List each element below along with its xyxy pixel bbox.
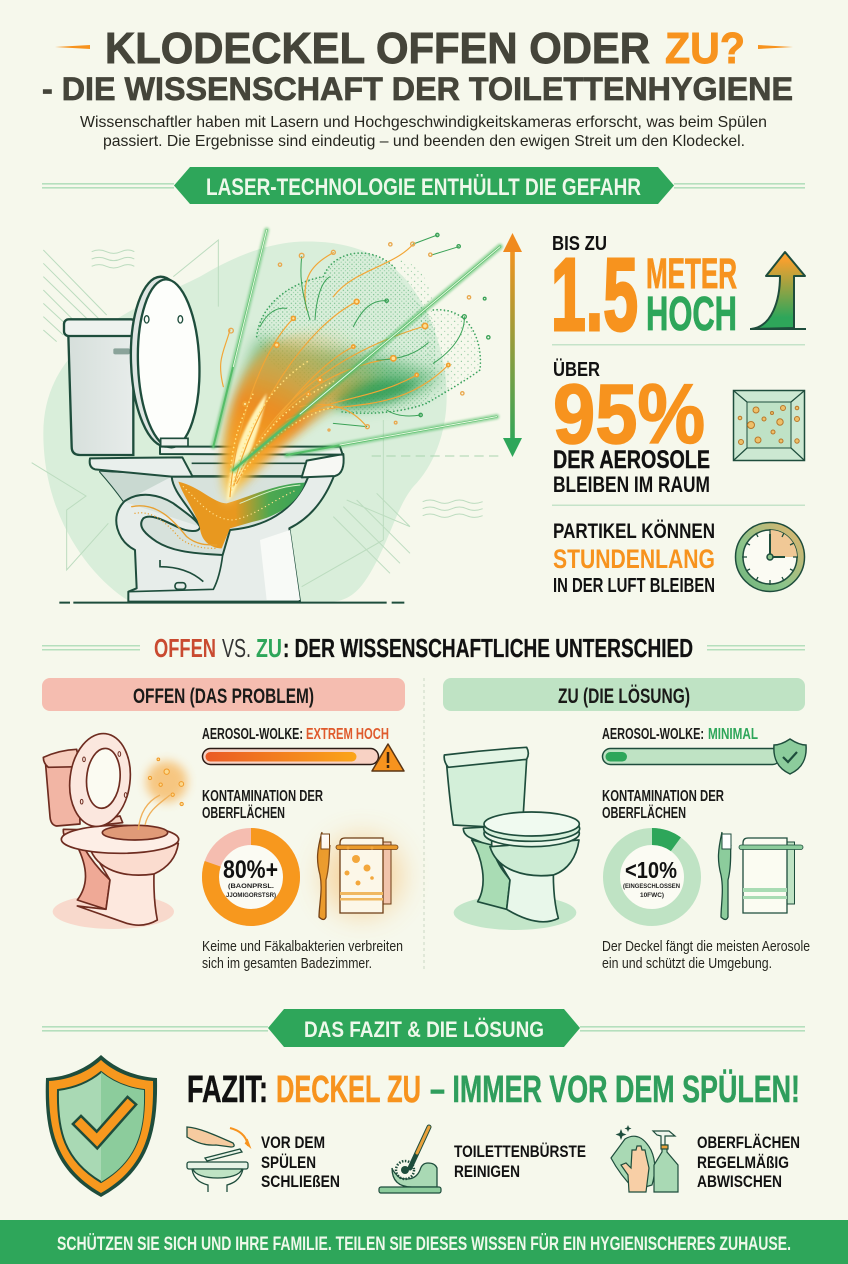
icon: rising arrow: [750, 252, 806, 329]
tip text: REINIGEN: [454, 1162, 520, 1181]
icon: clock: [736, 522, 804, 592]
number: 95%: [553, 367, 705, 461]
caption 2: BLEIBEN IM RAUM: [553, 472, 710, 497]
caption 1: DER AEROSOLE: [553, 446, 710, 474]
bowl inner band: [190, 453, 310, 477]
donut chart: below 10 percent: 10FWC): [640, 892, 664, 899]
toilet pedestal: [100, 472, 335, 602]
title decorative dash right: [758, 45, 793, 49]
aerosol glow: [138, 758, 187, 830]
panel header: ZU (DIE LÖSUNG): [558, 685, 690, 708]
section banner: laser technology: [42, 167, 805, 204]
panel header: [443, 678, 805, 711]
title line 1: KLODECKEL OFFEN ODER: [105, 24, 650, 73]
panel: closed lid: [443, 678, 810, 972]
icon: clean toothbrush: [718, 832, 731, 920]
aerosol bright speckles: [230, 360, 337, 490]
seat: [160, 447, 343, 455]
hero illustration: toilet with aerosol plume: [32, 230, 500, 603]
flush water: [178, 482, 305, 548]
intro text: Wissenschaftler haben mit Lasern und Hochgeschwindigkeitskameras erforscht, was beim Spülen: [80, 114, 767, 131]
donut chart: 80 percent: 80%+: [223, 856, 278, 884]
tip text: [454, 1142, 586, 1181]
tip text: ABWISCHEN: [697, 1172, 782, 1191]
contamination heading: KONTAMINATION DER: [202, 788, 323, 805]
background blob: [43, 241, 447, 602]
tip text: [261, 1133, 340, 1191]
contamination heading: [602, 788, 724, 822]
section heading: open vs closed: OFFEN: [154, 633, 216, 663]
aerosol flame core: [227, 393, 267, 502]
unit high: HOCH: [646, 288, 737, 341]
laser beam 1: [213, 230, 267, 447]
icon: toilet brush: [379, 1127, 441, 1193]
section banner: laser technology: LASER-TECHNOLOGIE ENTHÜLLT DIE GEFAHR: [206, 174, 641, 201]
section heading: open vs closed: [42, 633, 805, 663]
title line 2: - DIE WISSENSCHAFT DER TOILETTENHYGIENE: [42, 71, 793, 107]
stat: height: [551, 233, 806, 352]
tip: close before flushing: [187, 1127, 340, 1192]
conclusion headline: DECKEL ZU: [276, 1069, 421, 1111]
line 2: STUNDENLANG: [553, 544, 715, 574]
tip text: OBERFLÄCHEN: [697, 1133, 800, 1152]
line 1: PARTIKEL KÖNNEN: [553, 520, 715, 543]
aerosol dark green core: [333, 379, 420, 407]
conclusion headline: FAZIT:: [187, 1069, 268, 1111]
panel note: Der Deckel fängt die meisten Aerosole: [602, 939, 810, 955]
donut chart: 80 percent: JJOMIGORSTSR): [226, 892, 276, 899]
column divider: [423, 678, 425, 972]
tip: wipe surfaces: [611, 1125, 800, 1192]
tip text: VOR DEM: [261, 1133, 325, 1152]
trapway flow: [132, 485, 300, 548]
unit meter: METER: [646, 250, 737, 298]
stat: hours: [553, 520, 804, 597]
aerosol orange flame: [222, 331, 423, 503]
rim right: [302, 454, 344, 477]
tip text: REGELMÄßIG: [697, 1153, 789, 1172]
tank: [64, 319, 136, 455]
label: BIS ZU: [552, 233, 607, 255]
aerosol meter label: AEROSOL-WOLKE:: [602, 726, 704, 743]
icon: clean towel: [739, 838, 803, 913]
scattered ring particles: [229, 233, 490, 431]
icon: room with particles: [734, 390, 804, 460]
rim left: [90, 457, 193, 477]
panel note: sich im gesamten Badezimmer.: [202, 956, 372, 972]
trapway: [124, 477, 308, 555]
section banner: conclusion: DAS FAZIT & DIE LÖSUNG: [304, 1017, 544, 1042]
section heading: open vs closed: ZU: [256, 633, 282, 663]
intro text: [80, 114, 767, 150]
panel header: OFFEN (DAS PROBLEM): [133, 685, 314, 708]
height arrow: [503, 233, 522, 457]
title: [42, 24, 793, 107]
section heading: open vs closed: VS.: [222, 633, 251, 663]
illustration: closed toilet: [444, 747, 580, 930]
aerosol mesh cloud: [257, 253, 480, 413]
aerosol meter label: AEROSOL-WOLKE:: [202, 726, 303, 743]
title accent: ZU?: [665, 24, 745, 73]
icon: shield check: [774, 739, 806, 774]
floor line: [59, 600, 404, 606]
icon: contaminated towel: [322, 836, 402, 916]
label: ÜBER: [553, 358, 600, 381]
panel header: [42, 678, 405, 711]
donut chart: 80 percent: [210, 836, 292, 918]
panel note: [202, 939, 403, 972]
section banner: conclusion: [42, 1009, 805, 1047]
contamination heading: KONTAMINATION DER: [602, 788, 724, 805]
tip text: TOILETTENBÜRSTE: [454, 1142, 586, 1161]
aerosol meter label: MINIMAL: [708, 726, 758, 743]
contamination heading: OBERFLÄCHEN: [602, 805, 686, 822]
donut chart: below 10 percent: (EINGESCHLOSSEN: [623, 883, 680, 890]
divider: [552, 344, 805, 346]
toilet lid: [128, 276, 202, 448]
tip: clean toilet brush: [379, 1127, 586, 1193]
laser beam 3: [287, 417, 497, 455]
icon: warning triangle: [372, 744, 404, 771]
tip text: SPÜLEN: [261, 1153, 316, 1172]
aerosol particles: [243, 299, 450, 406]
flush handle: [113, 348, 130, 354]
tip text: SCHLIEßEN: [261, 1172, 340, 1191]
icon: contaminated toothbrush: [318, 832, 330, 920]
tip text: [697, 1133, 800, 1191]
panel note: [602, 939, 810, 972]
donut chart: below 10 percent: <10%: [625, 857, 677, 883]
illustration: open toilet: [43, 730, 187, 929]
section heading: open vs closed: : DER WISSENSCHAFTLICHE UNTERSCHIED: [283, 633, 693, 663]
donut chart: below 10 percent: [612, 836, 692, 918]
divider: [552, 504, 805, 506]
icon: large shield with check: [46, 1055, 157, 1197]
panel note: Keime und Fäkalbakterien verbreiten: [202, 939, 403, 955]
intro text: passiert. Die Ergebnisse sind eindeutig – und beenden den ewigen Streit um den Klodeckel.: [103, 133, 745, 150]
number: 1.5: [551, 237, 638, 352]
title decorative dash left: [55, 45, 90, 49]
conclusion headline: [187, 1068, 800, 1111]
stat: aerosols: [553, 358, 804, 497]
aerosol meter bar: [602, 748, 780, 764]
aerosol strands: [221, 244, 448, 497]
icon: hand closing lid: [187, 1127, 250, 1192]
panel: open lid: [42, 678, 405, 972]
footer banner: [0, 1220, 848, 1264]
geometric background lines: [32, 240, 483, 587]
aerosol meter label: EXTREM HOCH: [306, 726, 389, 743]
contamination heading: OBERFLÄCHEN: [202, 805, 285, 822]
aerosol deep green glow: [230, 337, 443, 487]
dashed height reference: [372, 454, 500, 457]
aerosol meter bar: [202, 748, 378, 764]
donut chart: 80 percent: (BAONPRSL.: [228, 883, 274, 890]
aerosol green strands: [260, 235, 464, 427]
line 3: IN DER LUFT BLEIBEN: [553, 575, 715, 597]
contamination heading: [202, 788, 323, 822]
icon: hand, cloth and spray bottle: [611, 1125, 678, 1192]
panel note: ein und schützt die Umgebung.: [602, 956, 772, 972]
laser beam 2: [233, 247, 500, 470]
